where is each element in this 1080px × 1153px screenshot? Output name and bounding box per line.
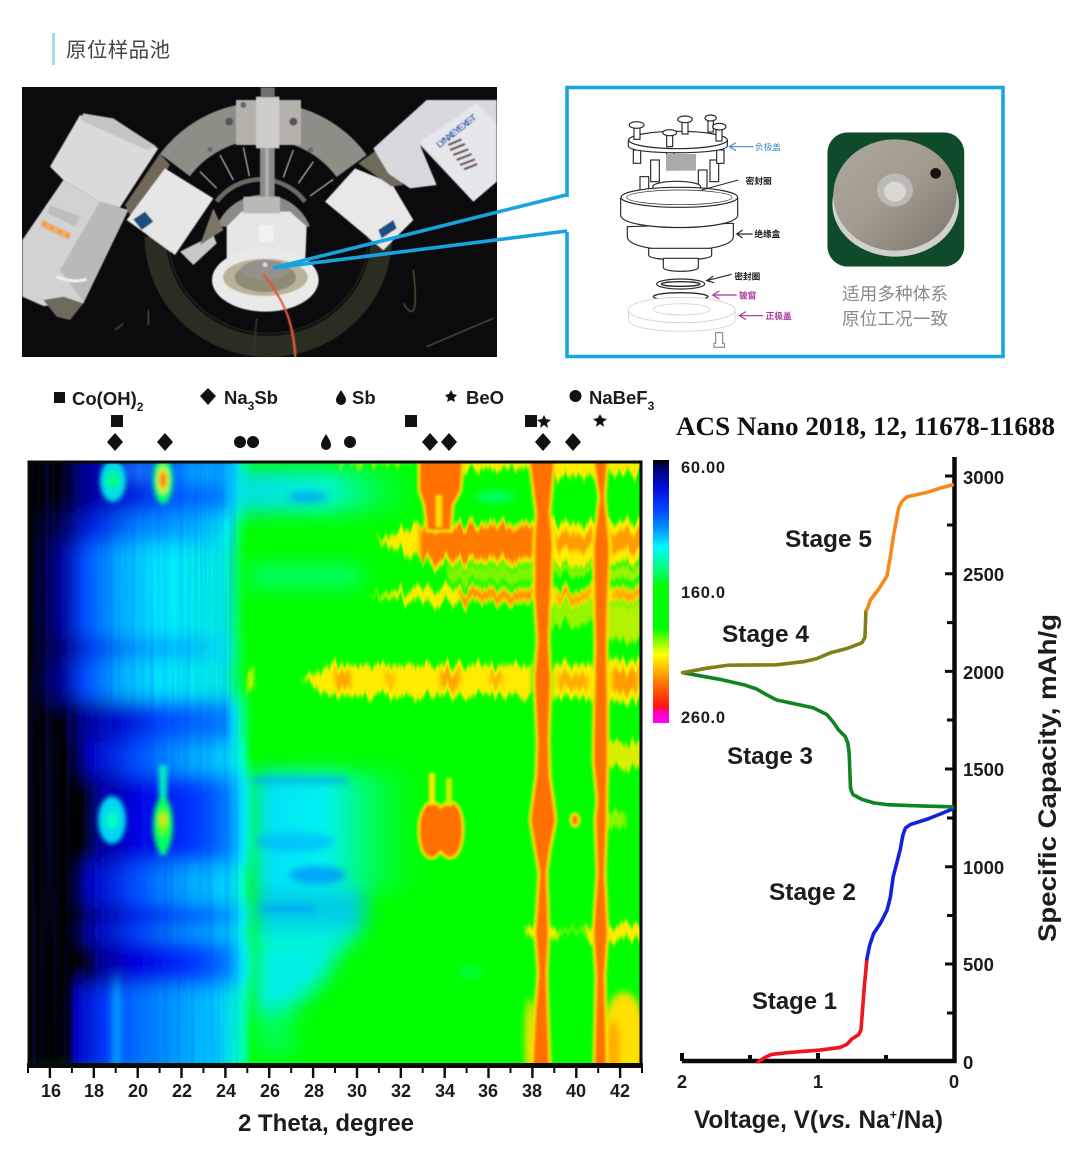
voltage tick labels — [677, 1071, 959, 1092]
streak texture — [28, 461, 236, 1065]
legend: phase markers: Sb — [254, 387, 278, 408]
heatmap frame and x axis ticks — [27, 462, 643, 1078]
voltage tick labels: 1 — [813, 1071, 823, 1092]
x axis title: Voltage, V(vs. Na — [694, 1106, 891, 1134]
x axis tick labels: 40 — [566, 1081, 586, 1101]
heatmap: operando XRD contour — [30, 464, 640, 1063]
x axis tick labels: 22 — [172, 1081, 192, 1101]
stage labels: Stage 5 — [785, 526, 872, 553]
x axis title: /Na) — [897, 1106, 943, 1134]
capacity and voltage axes — [682, 457, 956, 1063]
legend: phase markers: Co(OH) — [72, 388, 137, 409]
x axis title: + — [890, 1107, 897, 1122]
diagram: exploded in-situ cell — [621, 115, 792, 347]
x axis tick labels: 28 — [304, 1081, 324, 1101]
capacity tick labels — [963, 467, 1004, 1073]
x axis tick labels: 42 — [610, 1081, 630, 1101]
panel: in-situ cell detail box — [567, 88, 1003, 356]
chart: voltage vs specific capacity — [677, 457, 1062, 1134]
legend: phase markers: Na — [224, 387, 248, 408]
stage labels: Stage 3 — [727, 743, 813, 770]
markers: peak indices above heatmap — [107, 414, 607, 451]
x axis tick labels: 30 — [347, 1081, 367, 1101]
capacity tick labels: 2000 — [963, 662, 1004, 683]
x axis tick labels: 24 — [216, 1081, 236, 1101]
photo: diffractometer with in-situ cell: LYNXEYE XE-T — [434, 112, 479, 150]
citation: ACS Nano 2018, 12, 11678-11688 — [676, 412, 1055, 441]
x axis title: 2 Theta, degree — [238, 1110, 414, 1137]
legend: phase markers — [54, 387, 655, 414]
diagram: exploded in-situ cell: 正极盖 — [766, 310, 792, 321]
diagram: exploded in-situ cell: 铍窗 — [739, 289, 757, 300]
caption: applicability note: 适用多种体系 — [842, 284, 948, 304]
stage labels: Stage 1 — [752, 988, 837, 1015]
x axis tick labels: 34 — [435, 1081, 455, 1101]
x axis tick labels: 26 — [260, 1081, 280, 1101]
legend: phase markers: Sb — [352, 387, 376, 408]
x axis tick labels — [41, 1081, 630, 1101]
legend: phase markers: 3 — [648, 399, 655, 413]
diagram: exploded in-situ cell: 密封圈 — [746, 175, 772, 186]
heading: in-situ sample cell: 原位样品池 — [66, 39, 170, 62]
capacity tick labels: 500 — [963, 954, 994, 975]
photo: diffractometer with in-situ cell — [22, 87, 497, 357]
voltage tick labels: 2 — [677, 1071, 687, 1092]
legend: phase markers: 2 — [137, 400, 144, 414]
stage labels: Stage 4 — [722, 621, 809, 648]
voltage tick labels: 0 — [949, 1071, 959, 1092]
x axis tick labels: 16 — [41, 1081, 61, 1101]
colour scale bar — [653, 459, 725, 727]
peak stripes and blobs — [420, 458, 609, 1068]
diagram: exploded in-situ cell: 密封圈 — [734, 270, 761, 281]
x axis tick labels: 36 — [478, 1081, 498, 1101]
diagram: exploded in-situ cell: 绝缘盒 — [754, 228, 781, 239]
capacity tick labels: 1500 — [963, 759, 1004, 780]
callout: zoom lines from cell to detail box — [273, 195, 567, 268]
stage labels: Stage 2 — [769, 879, 856, 906]
colour scale bar: 260.0 — [681, 709, 725, 727]
legend: phase markers: 3 — [248, 399, 255, 413]
photo: sample cell disk — [827, 132, 964, 267]
capacity tick labels: 3000 — [963, 467, 1004, 488]
x axis tick labels: 20 — [128, 1081, 148, 1101]
colour scale bar: 160.0 — [681, 584, 725, 602]
diagram: exploded in-situ cell: 负极盖 — [755, 141, 781, 152]
colour scale bar: 60.00 — [681, 459, 725, 477]
caption: applicability note — [842, 284, 948, 329]
legend: phase markers: NaBeF — [589, 387, 648, 408]
capacity tick labels: 1000 — [963, 857, 1004, 878]
caption: applicability note: 原位工况一致 — [842, 309, 948, 329]
x axis tick labels: 38 — [522, 1081, 542, 1101]
stage labels — [722, 526, 872, 1015]
capacity tick labels: 0 — [963, 1052, 973, 1073]
capacity tick labels: 2500 — [963, 564, 1004, 585]
legend: phase markers: BeO — [466, 387, 504, 408]
y axis title: Specific Capacity, mAh/g — [1034, 614, 1062, 942]
x axis tick labels: 32 — [391, 1081, 411, 1101]
bottom right yellow zones — [519, 986, 640, 1063]
curves: stages 1 to 5 — [683, 485, 952, 1062]
x axis tick labels: 18 — [84, 1081, 104, 1101]
heading: in-situ sample cell — [52, 33, 170, 65]
